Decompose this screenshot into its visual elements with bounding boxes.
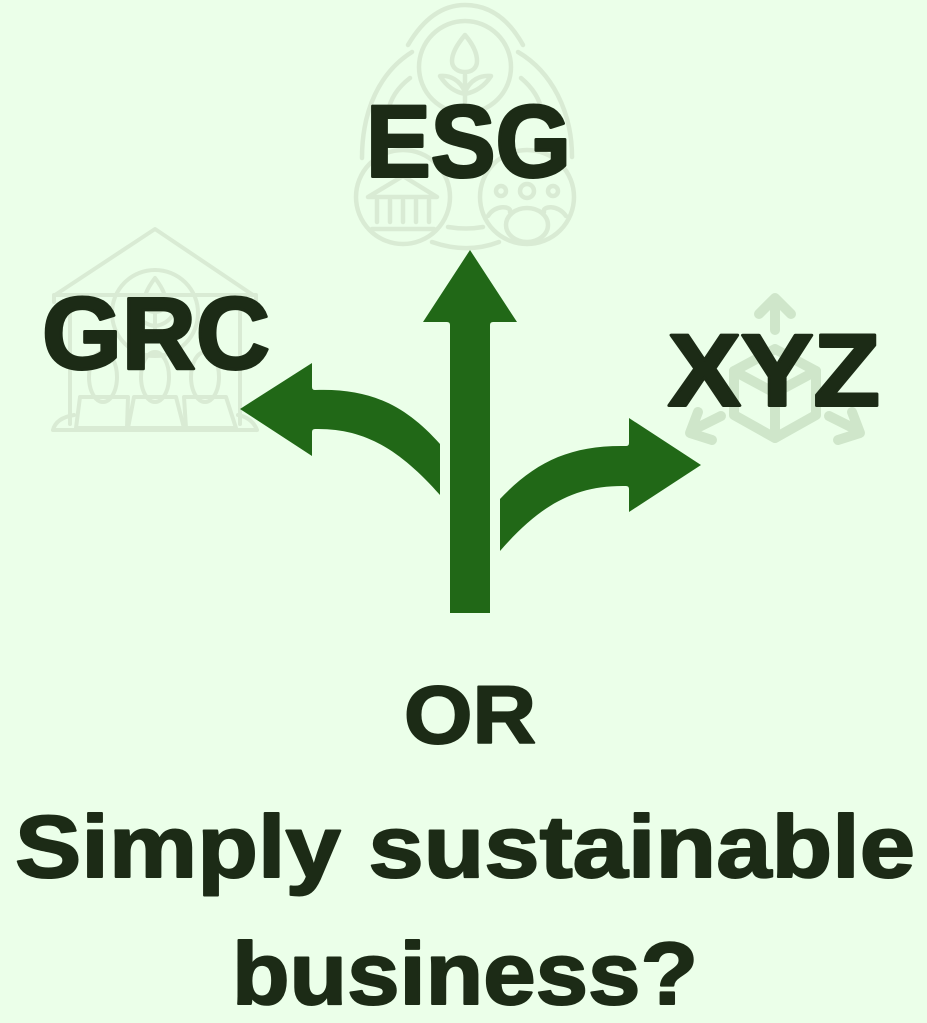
heading: Simply sustainable: Simply sustainable xyxy=(15,797,915,896)
heading: business?: business? xyxy=(232,924,698,1023)
label: ESG: ESG xyxy=(366,84,571,198)
arrow: curved left to GRC xyxy=(240,363,440,495)
text: OR: OR xyxy=(404,670,536,761)
arrow: curved right to XYZ xyxy=(500,418,701,551)
icon: XYZ cube with arrows xyxy=(690,298,860,440)
label: XYZ: XYZ xyxy=(668,314,880,428)
label: GRC: GRC xyxy=(42,276,270,390)
icon: GRC building xyxy=(53,229,257,430)
icon: ESG emblem (leaf, bank, people) xyxy=(356,5,574,248)
arrow: straight up to ESG xyxy=(423,250,517,613)
